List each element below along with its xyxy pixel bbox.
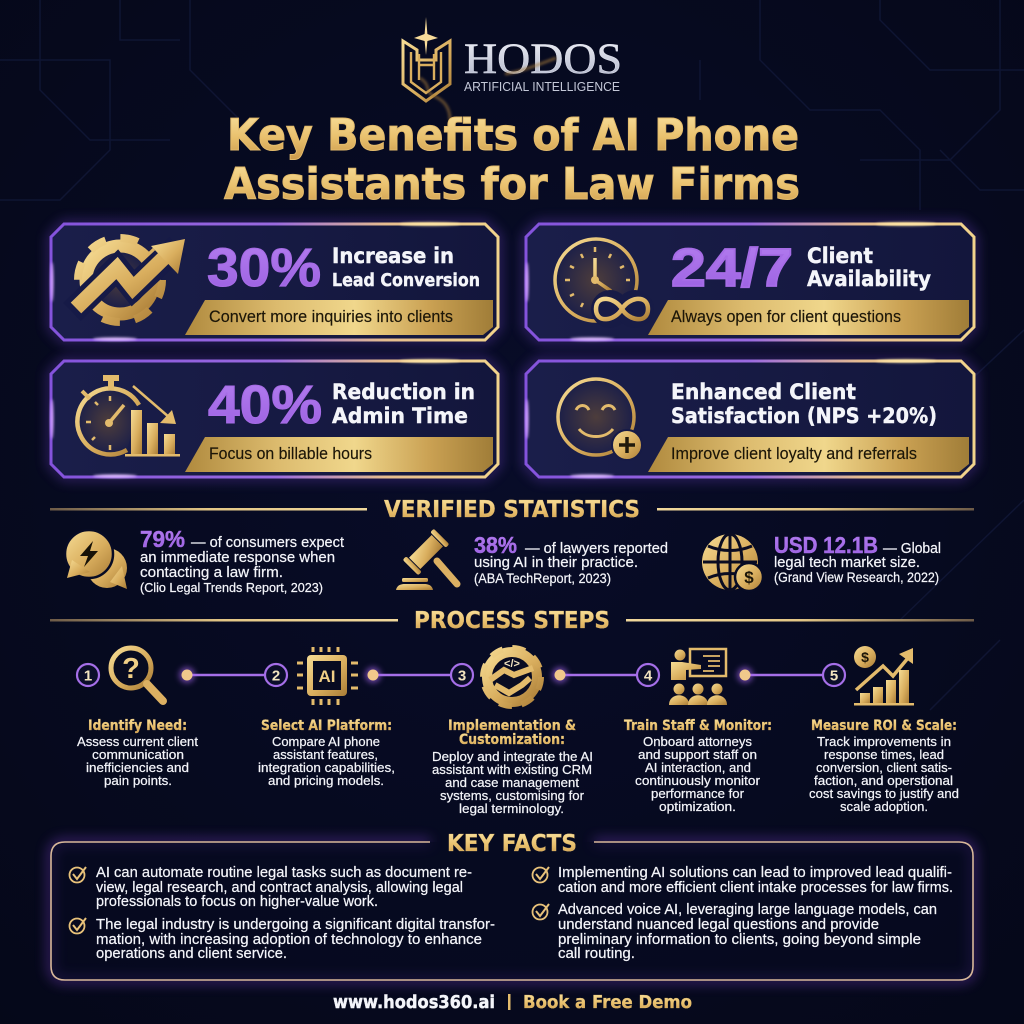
- step text: Train Staff & Monitor:: [624, 718, 772, 734]
- step text: Onboard attorneys: [643, 734, 752, 749]
- number badge 2: 2: [272, 668, 280, 684]
- step text: Compare AI phone: [272, 734, 380, 749]
- step text: pain points.: [104, 773, 172, 788]
- label: client availability: [807, 244, 931, 291]
- panel: 30% increase in lead conversion: [50, 222, 498, 341]
- wordmark: HODOS: [464, 36, 622, 83]
- fact 1: AI can automate routine legal tasks such as document re-: [96, 865, 472, 881]
- icon: rising chart with coin: $: [861, 649, 869, 665]
- step text: faction, and operstional: [814, 773, 953, 788]
- heading: key facts: KEY FACTS: [447, 831, 577, 857]
- fact 3: Implementing AI solutions can lead to improved lead qualifi-: [558, 865, 952, 881]
- step text: inefficiencies and: [86, 760, 189, 775]
- step text: [432, 718, 593, 816]
- icon: rising chart with coin: [854, 646, 914, 706]
- label: reduction in admin time: [332, 380, 475, 428]
- step text: Implementation &: [448, 718, 576, 734]
- step text: [77, 718, 198, 788]
- step 1: identify need: [77, 648, 198, 788]
- icon: check 1: [70, 867, 86, 882]
- title: Key Benefits of AI Phone: [227, 110, 799, 161]
- heading: verified statistics: VERIFIED STATISTICS: [384, 497, 640, 523]
- stat text: [474, 532, 668, 586]
- icon: check 4: [532, 904, 549, 920]
- band text: Convert more inquiries into clients: [209, 308, 453, 326]
- stat text: 79%: [140, 526, 185, 552]
- fact 2: The legal industry is undergoing a significant digital transfor-: [96, 917, 495, 933]
- number badge 2: [265, 664, 287, 686]
- number badge 5: [823, 664, 845, 686]
- label: reduction in admin time: Reduction in: [332, 380, 475, 404]
- stat text: (ABA TechReport, 2023): [474, 571, 611, 586]
- fact 1: view, legal research, and contract analysis, allowing legal: [96, 880, 463, 896]
- step text: assistant features,: [273, 747, 378, 762]
- gold band: [185, 437, 493, 472]
- stat text: using AI in their practice.: [474, 554, 638, 571]
- step 5: measure ROI and scale: [809, 646, 959, 814]
- step text: and support staff on: [638, 747, 757, 762]
- step text: response times, lead: [824, 747, 944, 762]
- icon: clock with infinity: [555, 239, 654, 328]
- stat: 40%: 40%: [208, 375, 322, 435]
- icon: AI chip: AI: [318, 667, 336, 686]
- panel: enhanced client satisfaction: [525, 359, 974, 478]
- icon: gear with handshake: </>: [504, 658, 520, 670]
- stat text: — of lawyers reported: [525, 540, 668, 557]
- step 3: implementation and customization: [432, 648, 593, 816]
- step text: AI interaction, and: [645, 760, 751, 775]
- icon: check 2: [70, 918, 86, 934]
- gold band: [648, 300, 969, 335]
- number badge 3: 3: [458, 668, 466, 684]
- step text: Identify Need:: [88, 718, 187, 734]
- fact 4: call routing.: [558, 946, 635, 962]
- number badge 5: 5: [830, 668, 838, 684]
- step text: and pricing models.: [268, 773, 384, 788]
- step text: scale adoption.: [840, 799, 928, 814]
- step 4: train staff and monitor: [624, 649, 772, 814]
- fact 4: Advanced voice AI, leveraging large language models, can: [558, 902, 937, 918]
- panel: 24/7 client availability: [525, 222, 974, 341]
- stat text: contacting a law firm.: [140, 564, 283, 581]
- step text: Deploy and integrate the AI: [432, 749, 593, 764]
- step text: performance for: [651, 786, 745, 801]
- icon: smiley with plus: [558, 379, 642, 460]
- stat text: an immediate response when: [140, 549, 335, 566]
- icon: stopwatch with falling bars: [77, 375, 180, 456]
- panel: 40% reduction in admin time: [50, 359, 498, 478]
- number badge 3: [451, 664, 473, 686]
- icon: gear with handshake: [483, 648, 541, 706]
- icon: trainer with audience: [669, 649, 727, 705]
- step text: conversion, client satis-: [816, 760, 952, 775]
- step text: Track improvements in: [817, 734, 951, 749]
- band text: Focus on billable hours: [209, 445, 372, 463]
- step text: integration capabilities,: [258, 760, 395, 775]
- title: [224, 110, 800, 210]
- fact 4: [558, 902, 937, 962]
- step text: continuously monitor: [635, 773, 761, 788]
- logo: Hodos Artificial Intelligence: [403, 17, 622, 120]
- footer: website and call to action: Book a Free Demo: [523, 992, 692, 1013]
- icon: gold H shield with star: [403, 17, 450, 120]
- stat: 38% of lawyers: [396, 529, 668, 590]
- step text: cost savings to justify and: [809, 786, 959, 801]
- stat text: legal tech market size.: [774, 554, 920, 571]
- stat: USD 12.1B market: [702, 532, 941, 591]
- step text: Select AI Platform:: [261, 718, 392, 734]
- fact 2: mation, with increasing adoption of technology to enhance: [96, 932, 482, 948]
- number badge 1: 1: [84, 668, 92, 684]
- fact 1: [96, 865, 472, 910]
- label: client availability: Availability: [807, 267, 931, 291]
- label: increase in lead conversion: Increase in: [332, 244, 454, 268]
- icon: globe with dollar coin: $: [744, 568, 754, 587]
- step text: [624, 718, 772, 814]
- process connectors: [179, 667, 824, 683]
- icon: chat bubbles with lightning: [65, 530, 127, 589]
- step 2: select AI platform: [258, 647, 395, 788]
- gold band: [648, 437, 969, 472]
- heading: process steps: PROCESS STEPS: [414, 608, 610, 634]
- stat: 30%: 30%: [207, 238, 321, 298]
- step text: Customization:: [459, 732, 565, 748]
- stat text: (Clio Legal Trends Report, 2023): [140, 580, 323, 595]
- fact 2: [96, 917, 495, 962]
- fact 4: preliminary information to clients, going beyond simple: [558, 932, 921, 948]
- label: increase in lead conversion: Lead Conversion: [332, 270, 480, 291]
- step text: legal terminology.: [459, 801, 564, 816]
- icon: check 3: [532, 867, 549, 882]
- band text: Improve client loyalty and referrals: [671, 445, 917, 463]
- fact 1: professionals to focus on higher-value work.: [96, 894, 378, 910]
- heading: enhanced client satisfaction: Satisfaction (NPS +20%): [671, 404, 937, 428]
- step text: systems, customising for: [440, 788, 585, 803]
- stat text: — of consumers expect: [191, 534, 345, 551]
- stat text: [140, 526, 345, 595]
- fact 2: operations and client service.: [96, 946, 287, 962]
- step text: communication: [92, 747, 184, 762]
- stat: 24/7: 24/7: [671, 238, 793, 298]
- fact 3: cation and more efficient client intake processes for law firms.: [558, 880, 953, 896]
- icon: magnifier with question mark: ?: [122, 653, 140, 685]
- icon: gear with rising arrow: [72, 238, 185, 322]
- label: reduction in admin time: Admin Time: [332, 404, 468, 428]
- tagline: ARTIFICIAL INTELLIGENCE: [464, 79, 620, 94]
- stat text: USD 12.1B: [774, 532, 878, 558]
- number badge 4: 4: [644, 668, 653, 684]
- stat text: — Global: [883, 540, 941, 557]
- step text: assistant with existing CRM: [432, 762, 592, 777]
- step text: [809, 718, 959, 814]
- band text: Always open for client questions: [671, 308, 901, 326]
- label: client availability: Client: [807, 244, 873, 268]
- step text: and case management: [445, 775, 579, 790]
- heading: enhanced client satisfaction: Enhanced Client: [671, 380, 856, 404]
- title: Assistants for Law Firms: [224, 159, 800, 210]
- step text: optimization.: [659, 799, 736, 814]
- stat: 79% of consumers: [65, 526, 345, 595]
- heading: enhanced client satisfaction: [671, 380, 937, 428]
- step text: [258, 718, 395, 788]
- label: increase in lead conversion: [332, 244, 480, 291]
- footer: website and call to action: www.hodos360.ai: [333, 992, 495, 1013]
- stat text: [774, 532, 941, 585]
- gold band: [185, 300, 493, 335]
- icon: gavel: [396, 529, 457, 590]
- fact 4: understand nuanced legal questions and provide: [558, 917, 879, 933]
- step text: Assess current client: [77, 734, 198, 749]
- footer: website and call to action: [333, 992, 692, 1013]
- number badge 4: [637, 664, 659, 686]
- stat text: 38%: [474, 532, 517, 558]
- step text: Measure ROI & Scale:: [811, 718, 957, 734]
- icon: globe with dollar coin: [702, 534, 763, 591]
- panel: key facts: [51, 831, 973, 980]
- fact 3: [558, 865, 953, 896]
- stat text: (Grand View Research, 2022): [774, 570, 939, 585]
- icon: AI chip: [297, 647, 358, 705]
